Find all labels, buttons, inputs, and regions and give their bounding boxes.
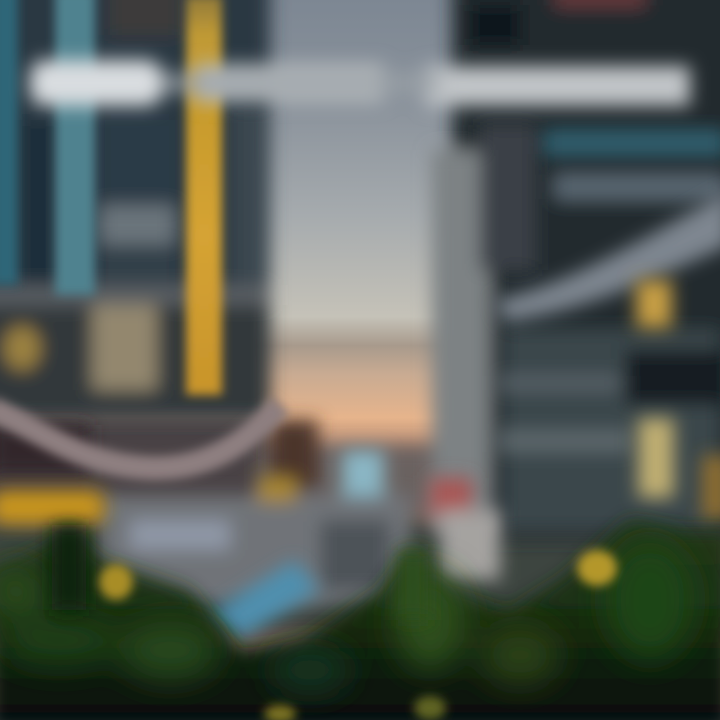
blue water shape <box>205 560 320 640</box>
left building <box>0 0 270 420</box>
right diagonal band <box>495 190 720 322</box>
teal columns <box>0 0 95 295</box>
foliage <box>0 520 720 720</box>
curved walkway <box>0 405 280 468</box>
title band <box>30 60 690 106</box>
window lights <box>636 280 720 520</box>
right building <box>432 0 720 540</box>
central low buildings <box>0 420 500 605</box>
dark base behind lower scene <box>0 415 720 630</box>
yellow column <box>186 0 222 395</box>
amber glow at left <box>0 490 105 524</box>
yellow flowers <box>99 550 617 720</box>
